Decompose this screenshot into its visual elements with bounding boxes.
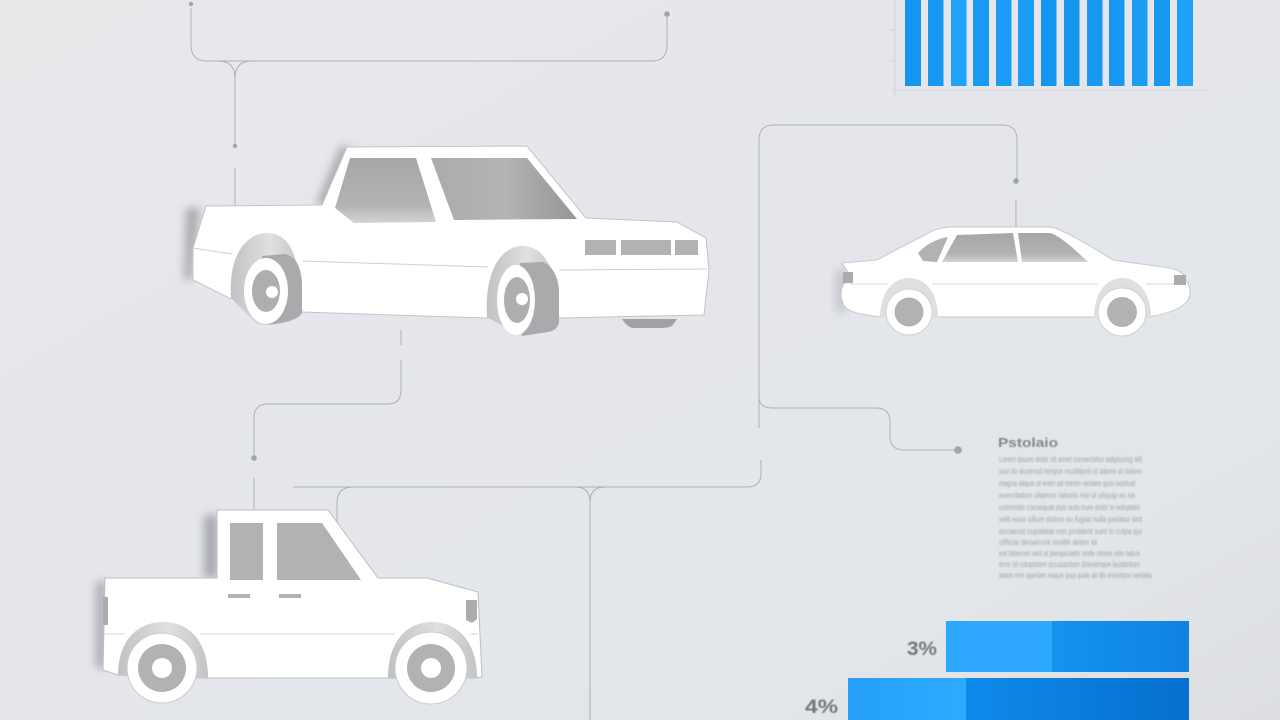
body paragraph: commodo consequat duis aute irure dolor in voluptate [999,503,1140,512]
body paragraph: officia deserunt mollit anim id [999,538,1097,547]
connector lines: right tree [759,125,1019,454]
body paragraph: est laborum sed ut perspiciatis unde omnis iste natus [999,549,1140,558]
light segment [848,678,966,720]
car shadow [184,147,352,280]
head light [466,600,477,623]
rear wheel [880,278,938,335]
light segment [946,621,1052,672]
dark segment [966,678,1189,720]
front window [277,523,361,580]
middle window [942,233,1018,262]
chart bars [905,0,1193,86]
body crease [104,633,478,635]
text block: right [998,435,1152,580]
tail light [843,272,853,283]
car body [193,146,709,318]
pickup truck: bottom left [96,510,482,704]
stacked bar: 4% [805,678,1189,720]
chart axes [890,0,1208,97]
stacked bar: 3% [907,621,1189,672]
rear wheel [118,622,208,703]
pickup car: large centre [184,146,709,336]
truck shadow [96,515,218,668]
truck body [103,510,482,678]
body crease [193,248,707,270]
sedan car: right [836,227,1190,336]
label 3%: 3% [907,639,937,660]
body paragraph: occaecat cupidatat non proident sunt in culpa qui [999,527,1142,536]
connector lines: lower tree [251,330,761,720]
body crease [850,283,1176,285]
front wheel [487,246,559,336]
car shadow [836,270,846,312]
rear side window [335,158,436,223]
head light [1174,275,1186,285]
front window [1018,233,1088,262]
label 4%: 4% [805,697,838,718]
body paragraph: exercitation ullamco laboris nisi ut aliquip ex ea [999,491,1135,500]
rear quarter window [918,237,948,262]
front under bumper [622,319,677,328]
body paragraph: sed do eiusmod tempor incididunt ut labore et dolore [999,467,1142,476]
tail light [103,597,108,625]
body paragraph: Lorem ipsum dolor sit amet consectetur adipiscing elit [999,455,1143,464]
body paragraph: velit esse cillum dolore eu fugiat nulla pariatur sint [999,515,1143,524]
body paragraph: magna aliqua ut enim ad minim veniam quis nostrud [999,479,1135,488]
body paragraph [999,455,1152,580]
headlights [585,240,698,255]
front side window [431,158,577,220]
body paragraph: totam rem aperiam eaque ipsa quae ab illo inventore veritatis [999,571,1152,580]
body paragraph: error sit voluptatem accusantium doloremque laudantium [999,560,1140,569]
door handles [228,594,301,598]
car body [841,227,1190,317]
dark segment [1052,621,1189,672]
bar chart: top right [890,0,1208,97]
front wheel [388,622,477,704]
connector lines: top tree [189,2,670,205]
rear window [230,523,263,580]
rear wheel [231,233,302,325]
front wheel [1094,278,1151,336]
text heading: Pstolaio [998,435,1058,450]
